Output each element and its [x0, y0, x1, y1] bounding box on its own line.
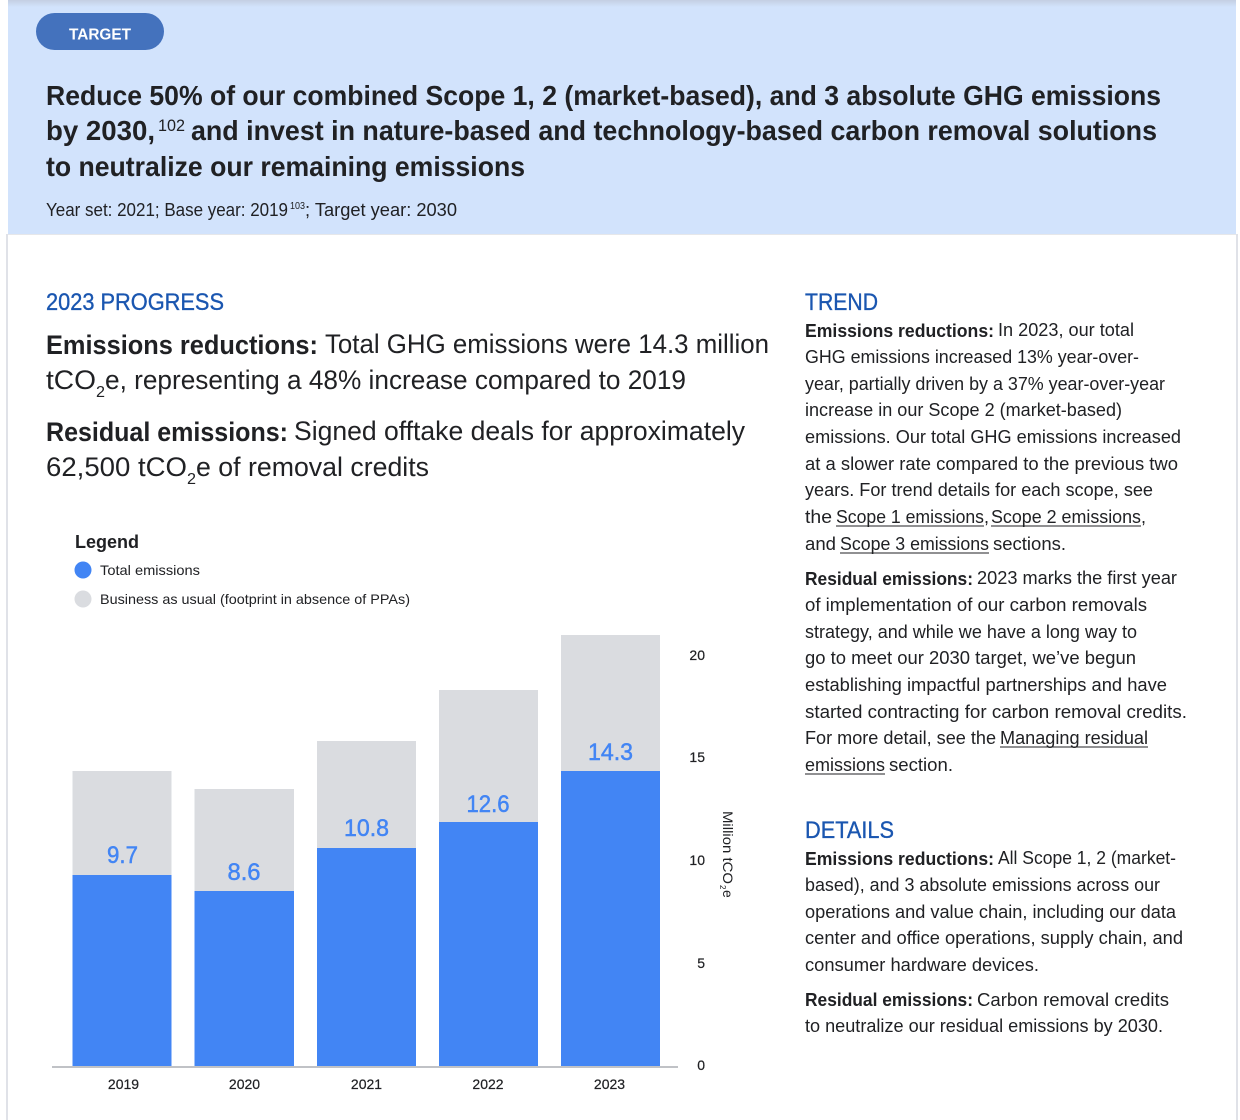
legend	[74, 532, 410, 608]
text: details emissions reductions: Emissions reductions:	[805, 849, 994, 869]
heading: 2023 progress: 2023 PROGRESS	[46, 289, 224, 316]
text: details residual emissions: Residual emissions:	[805, 990, 973, 1010]
y-axis title: e	[720, 890, 736, 898]
text: trend residual emissions: emissions	[805, 755, 885, 775]
text: emissions reductions progress: 2	[96, 384, 105, 401]
heading: target statement: and invest in nature-based and technology-based carbon removal solutions	[191, 115, 1157, 146]
text: trend residual emissions: started contracting for carbon removal credits.	[805, 702, 1187, 722]
panel: 2023 progress	[46, 289, 769, 488]
text: target dates: Year set: 2021; Base year: 2019	[46, 200, 288, 220]
text: residual emissions progress: Signed offtake deals for approximately	[294, 416, 745, 446]
text: residual emissions progress: 2	[187, 471, 196, 488]
badge: target	[36, 13, 164, 50]
heading: target statement: by 2030,	[46, 115, 155, 146]
text: target dates: 103	[290, 200, 305, 212]
y-axis labels: 5	[697, 955, 705, 971]
x-axis labels: 2020	[229, 1076, 260, 1092]
bar chart: emissions by year	[52, 635, 736, 1092]
y-axis title	[718, 811, 736, 898]
heading: target statement: Reduce 50% of our combined Scope 1, 2 (market-based), and 3 absolute GHG emissions	[46, 80, 1161, 111]
y-axis labels: 15	[689, 749, 705, 765]
text: trend emissions reductions: Scope 3 emissions	[840, 534, 989, 554]
text: trend residual emissions: For more detail, see the	[805, 728, 996, 748]
bar: 2022	[439, 690, 538, 1066]
text: trend residual emissions: Managing residual	[1000, 728, 1148, 748]
heading: details: DETAILS	[805, 817, 894, 844]
text: trend emissions reductions: GHG emissions increased 13% year-over-	[805, 347, 1139, 367]
text: trend emissions reductions: In 2023, our total	[998, 320, 1134, 340]
legend: Total emissions	[100, 562, 200, 578]
heading: target statement: to neutralize our remaining emissions	[46, 151, 525, 182]
panel: details	[805, 817, 1183, 1036]
text: trend residual emissions: of implementation of our carbon removals	[805, 595, 1147, 615]
x-axis labels: 2022	[472, 1076, 504, 1092]
text: trend residual emissions: establishing impactful partnerships and have	[805, 675, 1167, 695]
text: target dates: ; Target year: 2030	[305, 200, 457, 220]
text: trend emissions reductions: emissions. Our total GHG emissions increased	[805, 427, 1181, 447]
text: emissions reductions progress: e, representing a 48% increase compared to 2019	[105, 365, 686, 395]
text: emissions reductions progress: tCO	[46, 365, 96, 395]
text: trend emissions reductions: years. For trend details for each scope, see	[805, 480, 1153, 500]
y-axis labels: 20	[689, 647, 705, 663]
y-axis title: Million tCO	[720, 811, 736, 884]
text: trend residual emissions: go to meet our 2030 target, we’ve begun	[805, 648, 1136, 668]
bar: 2022: 12.6	[466, 791, 510, 818]
text: target dates	[46, 200, 457, 220]
text: trend residual emissions: Residual emissions:	[805, 569, 973, 589]
y-axis labels	[689, 647, 705, 1073]
text: trend emissions reductions: ,	[984, 507, 989, 527]
heading: target statement	[46, 80, 1161, 182]
bar: 2021	[317, 741, 416, 1066]
bar: 2020	[194, 789, 294, 1066]
text: emissions reductions progress: Emissions reductions:	[46, 330, 318, 360]
text: residual emissions progress: e of removal credits	[196, 452, 429, 482]
bar: 2023: 14.3	[588, 739, 633, 766]
text: residual emissions progress	[46, 416, 745, 488]
text: details residual emissions: to neutralize our residual emissions by 2030.	[805, 1016, 1163, 1036]
text: trend residual emissions	[805, 568, 1187, 775]
x-axis labels: 2021	[351, 1076, 382, 1092]
text: trend emissions reductions: sections.	[993, 534, 1066, 554]
text: details emissions reductions: operations and value chain, including our data	[805, 902, 1177, 922]
text: trend emissions reductions: Emissions reductions:	[805, 321, 994, 341]
text: details emissions reductions: All Scope 1, 2 (market-	[998, 848, 1176, 868]
text: trend residual emissions: 2023 marks the first year	[977, 568, 1177, 588]
y-axis labels: 0	[697, 1057, 705, 1073]
text: trend residual emissions: strategy, and while we have a long way to	[805, 622, 1137, 642]
text: details residual emissions: Carbon removal credits	[977, 990, 1169, 1010]
text: trend emissions reductions: Scope 2 emissions	[991, 507, 1141, 527]
bar: 2021: 10.8	[344, 815, 389, 842]
bar: 2019: 9.7	[107, 842, 138, 869]
text: details emissions reductions: center and office operations, supply chain, and	[805, 928, 1183, 948]
text: residual emissions progress: 62,500 tCO	[46, 452, 187, 482]
text: details residual emissions	[805, 990, 1169, 1036]
bar: 2020: 8.6	[228, 859, 260, 886]
text: trend emissions reductions: and	[805, 534, 836, 554]
text: trend emissions reductions: at a slower rate compared to the previous two	[805, 454, 1178, 474]
y-axis title: 2	[718, 885, 727, 890]
panel: trend	[805, 289, 1187, 775]
badge: target: TARGET	[69, 26, 131, 44]
heading: trend: TREND	[805, 289, 878, 316]
text: trend emissions reductions	[805, 320, 1181, 554]
x-axis labels	[108, 1076, 625, 1092]
text: residual emissions progress: Residual emissions:	[46, 417, 288, 447]
text: trend emissions reductions: the	[805, 507, 832, 527]
bar: 2019	[72, 771, 172, 1066]
text: emissions reductions progress: Total GHG emissions were 14.3 million	[325, 329, 769, 359]
text: trend emissions reductions: ,	[1141, 507, 1146, 527]
text: emissions reductions progress	[46, 329, 769, 401]
text: details emissions reductions	[805, 848, 1183, 975]
y-axis labels: 10	[689, 852, 705, 868]
x-axis labels: 2019	[108, 1076, 139, 1092]
text: details emissions reductions: based), and 3 absolute emissions across our	[805, 875, 1160, 895]
text: trend residual emissions: section.	[889, 755, 953, 775]
x-axis labels: 2023	[594, 1076, 625, 1092]
legend: Legend	[75, 532, 139, 552]
text: trend emissions reductions: increase in our Scope 2 (market-based)	[805, 400, 1122, 420]
legend: Business as usual (footprint in absence of PPAs)	[100, 591, 410, 607]
panel: target header	[8, 0, 1236, 235]
bar: 2023	[561, 635, 660, 1066]
text: trend emissions reductions: year, partially driven by a 37% year-over-year	[805, 374, 1165, 394]
text: details emissions reductions: consumer hardware devices.	[805, 955, 1039, 975]
heading: target statement: 102	[158, 116, 185, 135]
text: trend emissions reductions: Scope 1 emissions	[836, 507, 984, 527]
